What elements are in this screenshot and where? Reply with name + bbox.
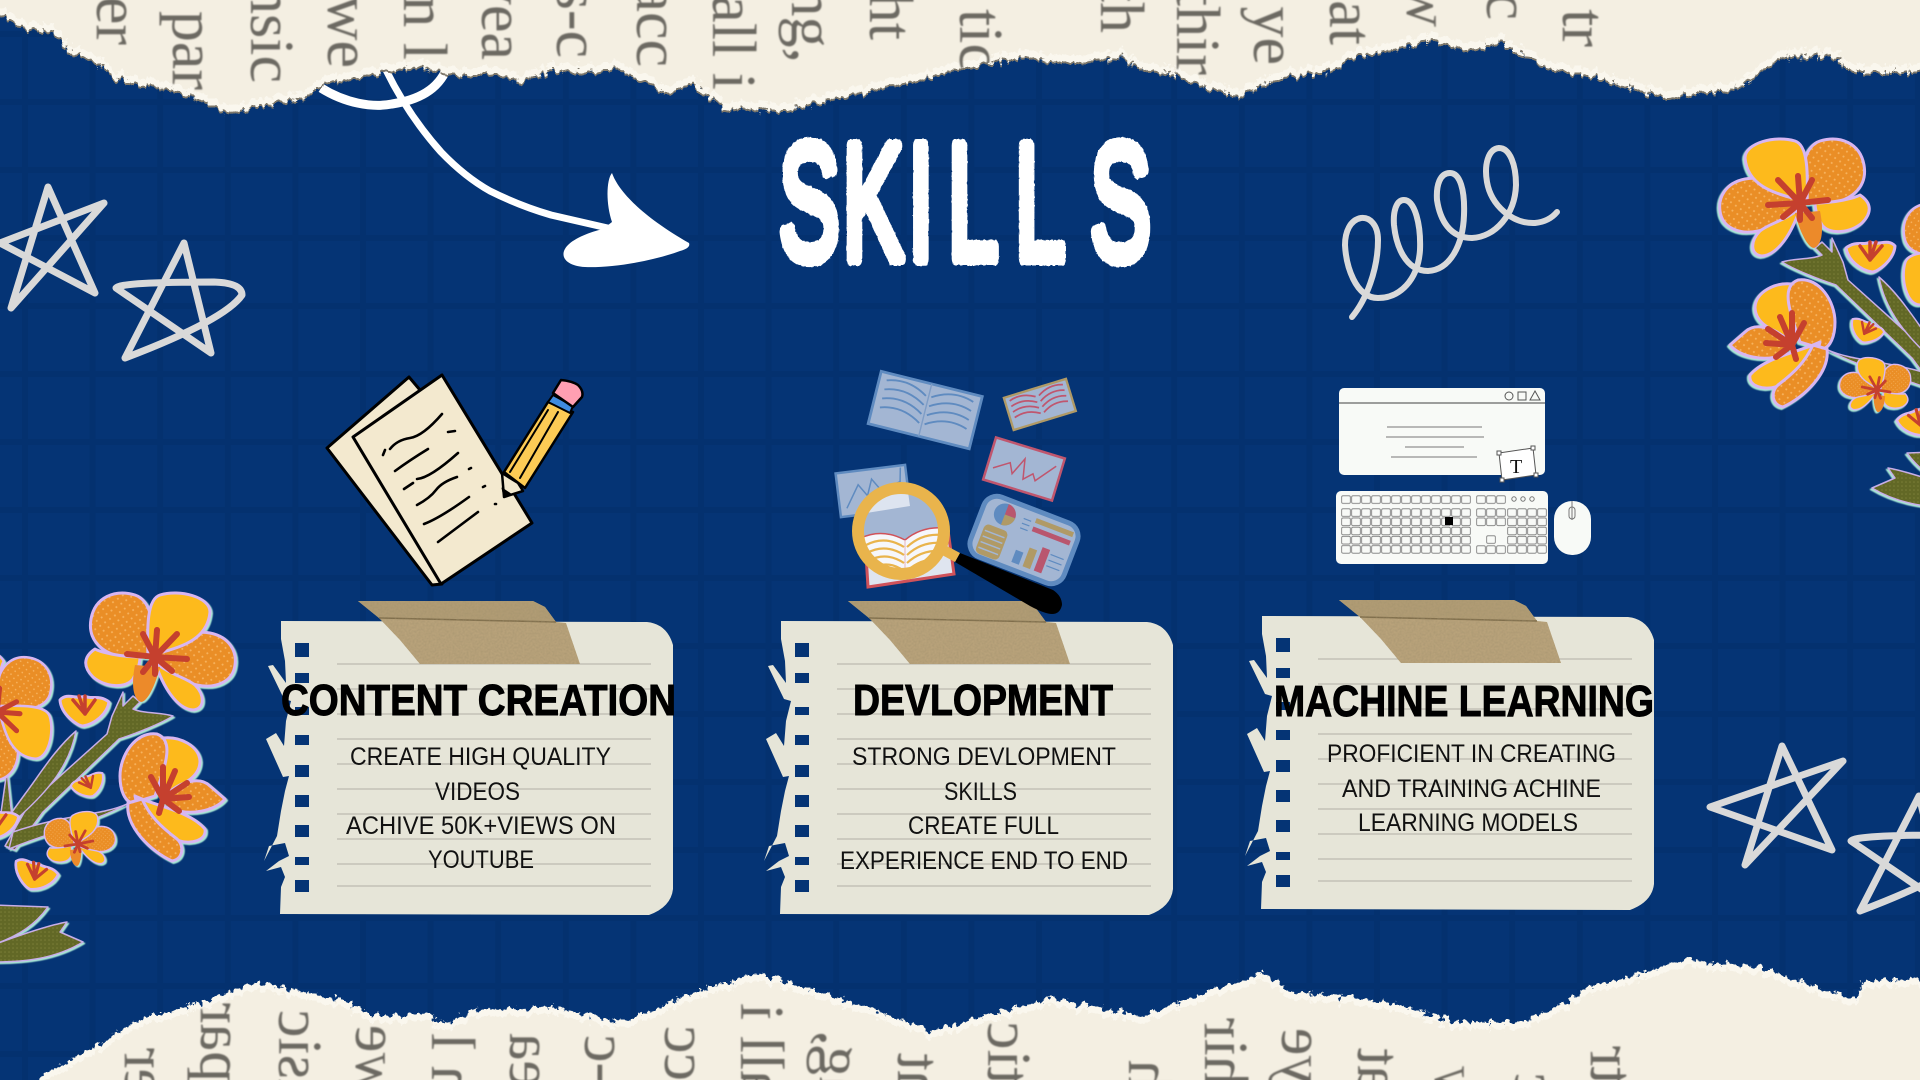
card: content creation xyxy=(264,601,676,915)
flowers: top right cluster xyxy=(1720,139,1920,508)
body: machine learning: LEARNING MODELS xyxy=(1358,809,1578,837)
torn newspaper: top: par xyxy=(159,11,227,90)
body: content creation: ACHIVE 50K+VIEWS ON xyxy=(346,812,616,840)
large open book xyxy=(868,371,982,449)
body: machine learning: AND TRAINING ACHINE xyxy=(1342,775,1601,803)
doodle stars bottom right xyxy=(1710,746,1920,911)
body: content creation: VIDEOS xyxy=(435,778,520,806)
body: development xyxy=(840,743,1128,875)
dashboard panel xyxy=(966,492,1082,588)
torn newspaper: top xyxy=(0,0,1920,114)
body: development: STRONG DEVLOPMENT xyxy=(852,743,1116,771)
body: development: CREATE FULL xyxy=(908,812,1059,840)
heading: development: DEVLOPMENT xyxy=(853,676,1113,725)
body: content creation xyxy=(346,743,616,874)
icon: computer window xyxy=(1339,388,1545,482)
icon: mouse xyxy=(1554,501,1591,555)
magnifying glass xyxy=(858,485,1062,614)
torn newspaper: top: tic xyxy=(946,9,1014,71)
icon: computer window: T xyxy=(1510,456,1522,478)
heading: machine learning: MACHINE LEARNING xyxy=(1274,677,1654,726)
doodle stars top left xyxy=(0,187,242,358)
red line chart xyxy=(983,437,1065,501)
card: machine learning xyxy=(1245,600,1654,910)
red-bordered book sheet xyxy=(865,530,954,587)
body: development: EXPERIENCE END TO END xyxy=(840,847,1128,875)
torn newspaper: bottom: par xyxy=(187,1003,255,1080)
blue line chart xyxy=(836,465,910,517)
icon: keyboard xyxy=(1336,491,1548,564)
title: SKILLS xyxy=(779,110,1151,295)
torn newspaper: bottom xyxy=(36,960,1920,1080)
body: content creation: YOUTUBE xyxy=(428,846,534,874)
flowers: lower left cluster xyxy=(0,593,235,962)
body: machine learning xyxy=(1327,740,1616,837)
body: content creation: CREATE HIGH QUALITY xyxy=(350,743,611,771)
icon: papers and pencil xyxy=(327,375,582,585)
arrow pointing at title xyxy=(321,68,689,267)
body: development: SKILLS xyxy=(944,778,1017,806)
doodle squiggle xyxy=(1345,148,1557,317)
icon: research illustration xyxy=(836,371,1082,614)
card: development xyxy=(764,601,1173,915)
torn newspaper: top: ye xyxy=(1240,6,1308,65)
heading: content creation: CONTENT CREATION xyxy=(281,676,676,725)
small open book xyxy=(1004,379,1076,430)
torn newspaper: top: at xyxy=(1316,0,1384,45)
body: machine learning: PROFICIENT IN CREATING xyxy=(1327,740,1616,768)
torn newspaper: top: tr xyxy=(1549,9,1617,47)
